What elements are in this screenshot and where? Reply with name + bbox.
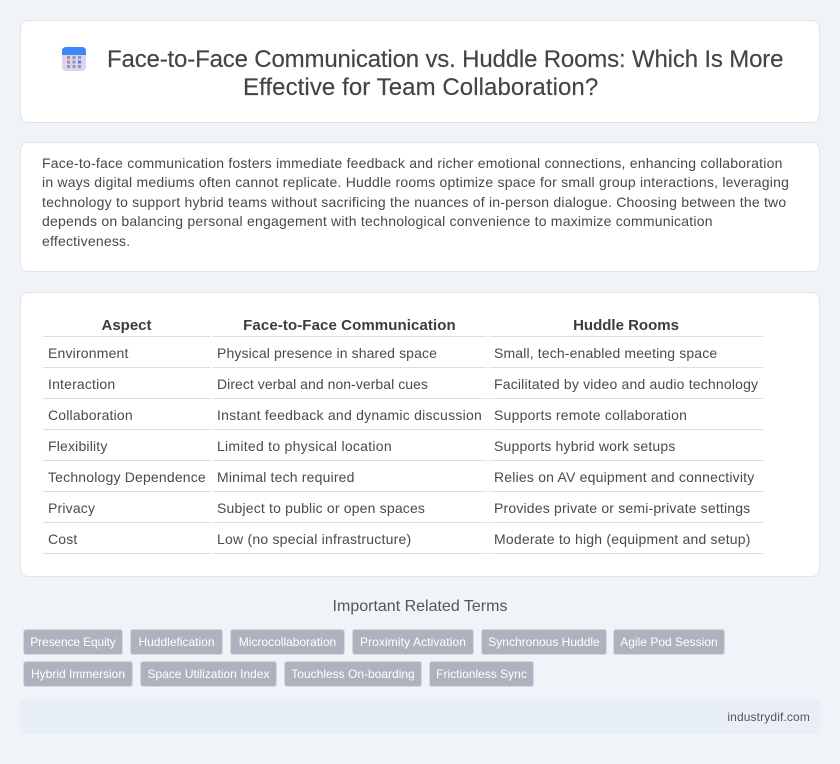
- footer bar: [20, 700, 820, 734]
- related term tags: Touchless On-boarding: [291, 667, 415, 681]
- comparison table: Moderate to high (equipment and setup): [494, 531, 751, 547]
- related term tags: Proximity Activation: [360, 635, 466, 649]
- comparison table: Privacy: [48, 500, 95, 516]
- panel: introduction: [20, 142, 820, 272]
- comparison table: [43, 317, 763, 554]
- comparison table: Huddle Rooms: [573, 317, 679, 334]
- comparison table: Low (no special infrastructure): [217, 531, 411, 547]
- text block: introduction paragraph: in ways digital mediums often cannot replicate. Huddle rooms optimize space for small group interactions, leveraging: [42, 174, 789, 190]
- comparison table: Cost: [48, 531, 78, 547]
- text block: introduction paragraph: depends on balancing personal engagement with technological convenience to maximize communication: [42, 213, 713, 229]
- icon: calendar: [62, 47, 86, 71]
- text block: introduction paragraph: [42, 155, 789, 249]
- panel: comparison table: [20, 292, 820, 577]
- comparison table: Flexibility: [48, 438, 108, 454]
- related term tags: Presence Equity: [30, 635, 116, 649]
- comparison table: Face-to-Face Communication: [243, 317, 456, 334]
- comparison table: Provides private or semi-private settings: [494, 500, 750, 516]
- text block: introduction paragraph: effectiveness.: [42, 233, 130, 249]
- related term tags: Microcollaboration: [239, 635, 336, 649]
- heading: important related terms: Important Related Terms: [333, 598, 507, 615]
- comparison table: Limited to physical location: [217, 438, 392, 454]
- comparison table: Technology Dependence: [48, 469, 206, 485]
- related term tags: Frictionless Sync: [436, 667, 527, 681]
- related term tags: Hybrid Immersion: [31, 667, 125, 681]
- comparison table: Supports hybrid work setups: [494, 438, 676, 454]
- text block: introduction paragraph: Face-to-face communication fosters immediate feedback and richer emotional connections, enhancing collaboration: [42, 155, 783, 171]
- comparison table: Supports remote collaboration: [494, 407, 687, 423]
- related term tags: Synchronous Huddle: [488, 635, 600, 649]
- comparison table: Minimal tech required: [217, 469, 355, 485]
- footer credit: industrydif.com: [727, 710, 810, 724]
- comparison table: Relies on AV equipment and connectivity: [494, 469, 754, 485]
- title: Face-to-Face Communication vs. Huddle Rooms: Which Is More: [107, 46, 783, 73]
- comparison table: Small, tech-enabled meeting space: [494, 345, 717, 361]
- comparison table: Instant feedback and dynamic discussion: [217, 407, 482, 423]
- comparison table: Physical presence in shared space: [217, 345, 437, 361]
- panel: title header: [20, 20, 820, 123]
- title: Effective for Team Collaboration?: [243, 74, 598, 101]
- related term tags: Agile Pod Session: [620, 635, 718, 649]
- comparison table: Facilitated by video and audio technology: [494, 376, 758, 392]
- title: [107, 46, 783, 101]
- comparison table: Aspect: [101, 317, 152, 334]
- comparison table: Subject to public or open spaces: [217, 500, 425, 516]
- related term tags: Space Utilization Index: [147, 667, 270, 681]
- comparison table: Environment: [48, 345, 129, 361]
- related term tags: Huddlefication: [138, 635, 215, 649]
- text block: introduction paragraph: technology to support hybrid teams without sacrificing the nuances of in-person dialogue. Choosing between the two: [42, 194, 786, 210]
- comparison table: Direct verbal and non-verbal cues: [217, 376, 428, 392]
- comparison table: Interaction: [48, 376, 115, 392]
- related term tags: [23, 629, 725, 687]
- comparison table: Collaboration: [48, 407, 133, 423]
